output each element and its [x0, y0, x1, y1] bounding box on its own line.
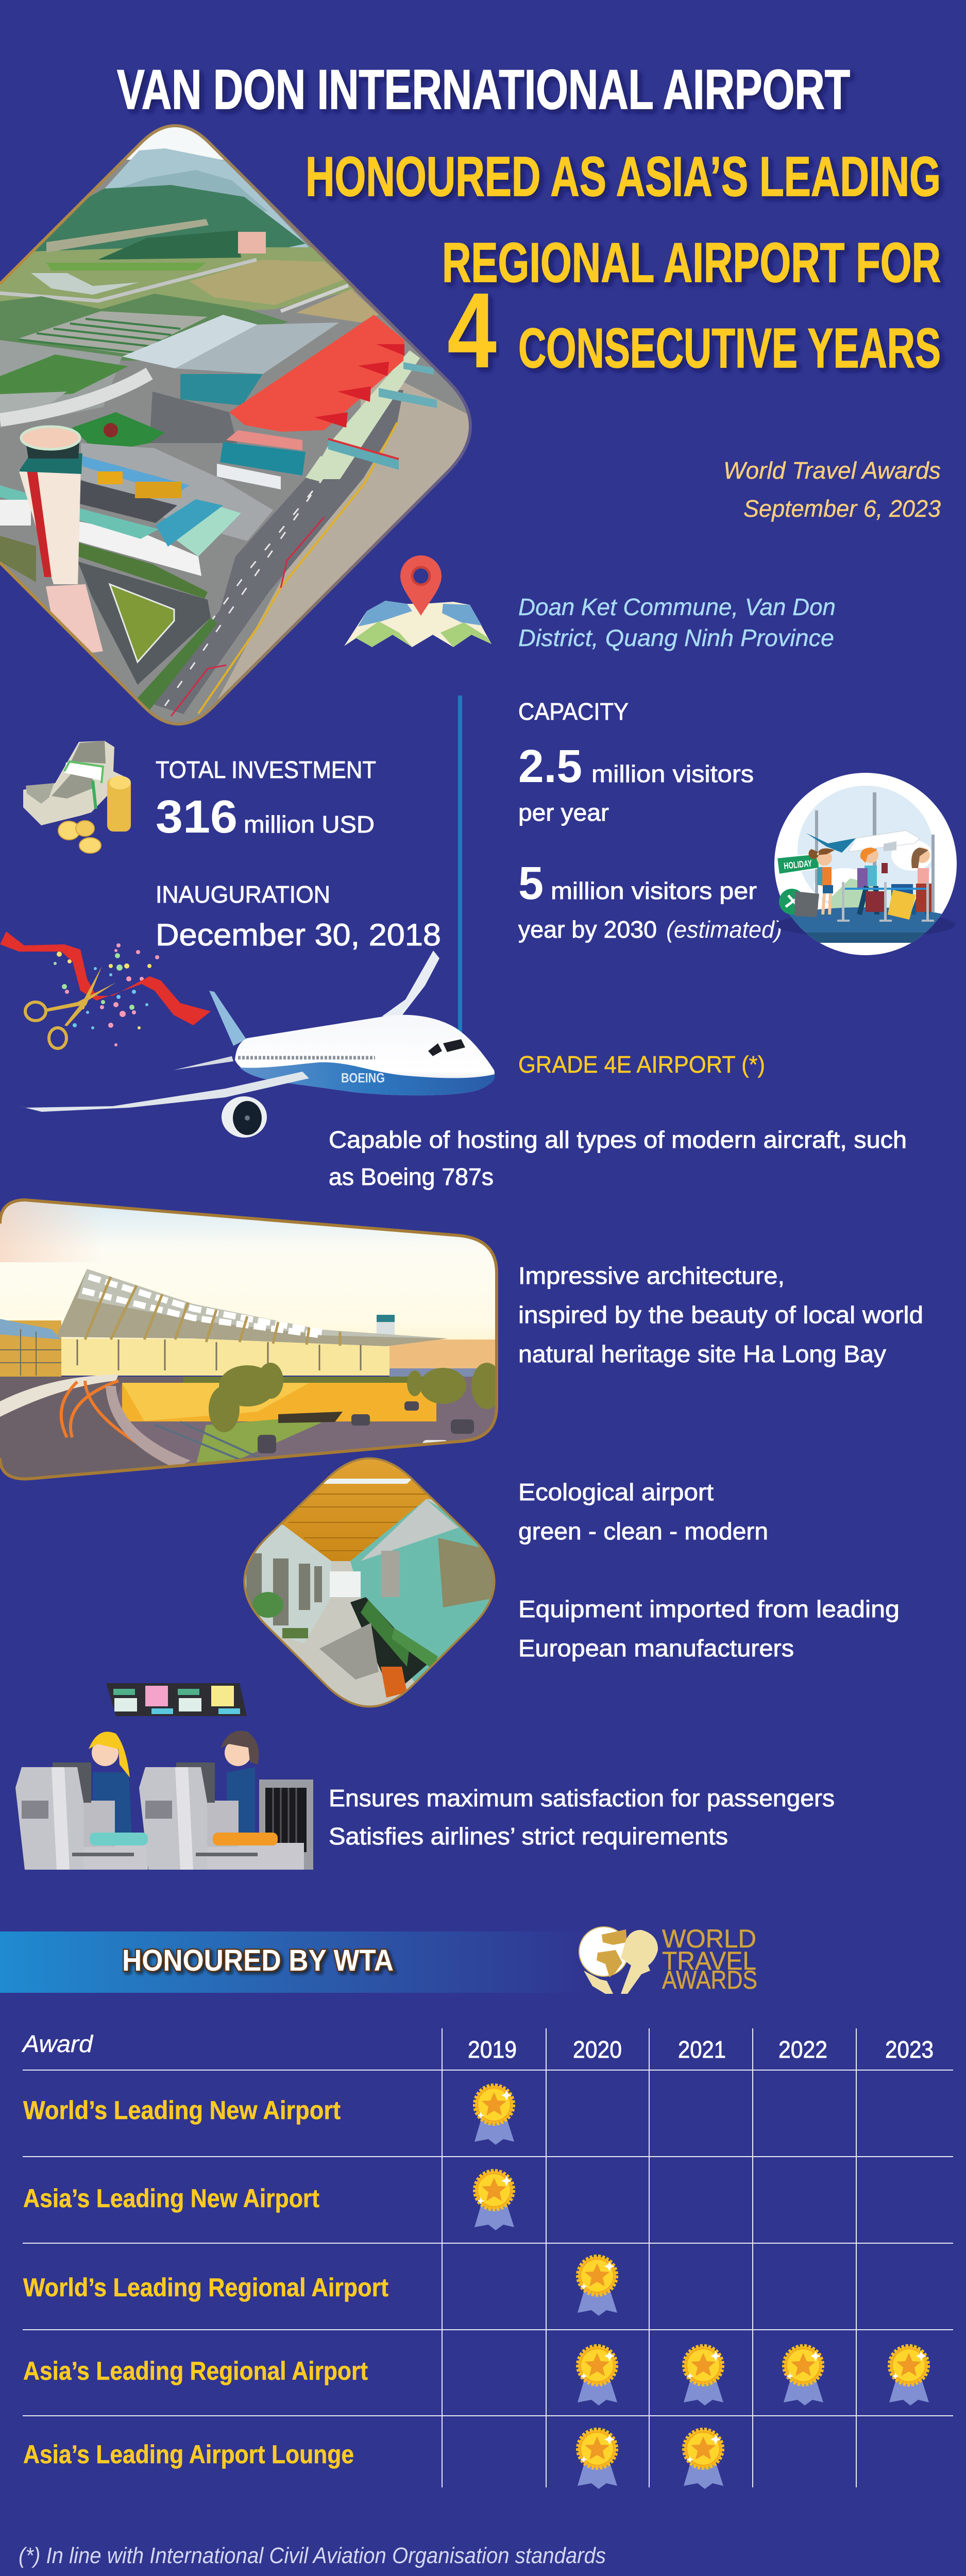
fuselage [235, 1015, 495, 1095]
text: capacity: million visitors per [551, 877, 757, 904]
text: capacity: per year [518, 799, 609, 826]
text: capable of hosting: as Boeing 787s [329, 1163, 494, 1190]
text: location: District, Quang Ninh Province [518, 624, 834, 651]
text: architecture: inspired by the beauty of local world [518, 1301, 923, 1328]
fuselage blue belly [240, 1062, 495, 1095]
row: World's Leading New Airport [23, 2086, 514, 2145]
text: inauguration [156, 881, 441, 952]
text: capable of hosting: Capable of hosting all types of modern aircraft, such [329, 1126, 907, 1153]
icon: map pin [344, 555, 492, 647]
icon: passengers queuing at airport [773, 773, 958, 955]
text: total investment [156, 756, 376, 843]
icon: check-in counters with staff [15, 1683, 313, 1870]
text: capacity [518, 698, 782, 943]
counter right [139, 1762, 304, 1870]
icon: scissors cutting red ribbon with confetti [0, 931, 211, 1048]
table header: 2022 [778, 2036, 827, 2063]
cockpit windows [428, 1039, 465, 1056]
title block [117, 58, 941, 391]
staff member with dark hair [221, 1731, 259, 1834]
table header: 2020 [573, 2036, 622, 2063]
text: equipment: European manufacturers [518, 1635, 794, 1662]
row: World's Leading Regional Airport: World’s Leading Regional Airport [23, 2273, 388, 2302]
aircraft label: BOEING [341, 1070, 385, 1086]
text: location: Doan Ket Commune, Van Don [518, 594, 836, 620]
section heading: HONOURED BY WTA [122, 1944, 394, 1977]
text: ecological: green - clean - modern [518, 1518, 768, 1545]
table: awards by year [21, 2028, 953, 2489]
table header: 2021 [678, 2036, 726, 2063]
text: capacity: million visitors [591, 760, 754, 787]
text: ecological [518, 1479, 768, 1545]
text: capable of hosting [329, 1126, 907, 1190]
row: World's Leading New Airport: World’s Leading New Airport [23, 2096, 341, 2125]
counter left [15, 1762, 148, 1870]
text: inauguration: INAUGURATION [156, 881, 330, 908]
headline number 4: 4 [447, 271, 497, 391]
section banner [0, 1931, 590, 1993]
text: location [518, 594, 836, 651]
row: Asia's Leading New Airport: Asia’s Leading New Airport [23, 2184, 319, 2213]
text: architecture [518, 1262, 923, 1367]
confetti dots [54, 943, 159, 1046]
text: inauguration: December 30, 2018 [156, 918, 441, 952]
text: capacity: year by 2030 [518, 916, 657, 943]
text: architecture: natural heritage site Ha Long Bay [518, 1341, 886, 1367]
row: Asia's Leading Regional Airport [23, 2346, 929, 2405]
text: satisfaction [329, 1785, 835, 1850]
photo: terminal interior diamond [243, 1457, 496, 1707]
text: architecture: Impressive architecture, [518, 1262, 785, 1289]
text: capacity: 5 [518, 858, 544, 909]
row: Asia's Leading Regional Airport: Asia’s Leading Regional Airport [23, 2357, 368, 2385]
text: awards date [723, 457, 941, 522]
text: awards date: September 6, 2023 [743, 495, 941, 522]
icon: passengers queuing at airport: HOLIDAY [783, 858, 812, 871]
divider: vertical blue line [458, 696, 462, 1033]
table header: 2019 [468, 2036, 517, 2063]
table header [21, 2030, 934, 2063]
table grid [23, 2028, 953, 2487]
luggage [90, 1833, 278, 1845]
logo: World Travel Awards: AWARDS [662, 1965, 757, 1994]
text: equipment: Equipment imported from leading [518, 1596, 900, 1622]
cabin windows [238, 1056, 375, 1059]
text: capacity: (estimated) [666, 916, 782, 943]
photo: terminal architecture [0, 1195, 502, 1485]
text: satisfaction: Ensures maximum satisfaction for passengers [329, 1785, 835, 1811]
text: total investment: 316 [156, 791, 238, 843]
text: capacity: CAPACITY [518, 698, 629, 725]
flight information boards [106, 1683, 247, 1716]
footnote: (*) In line with International Civil Aviation Organisation standards [19, 2543, 606, 2568]
tail fin [209, 991, 246, 1046]
photo: aerial view of airport in diamond frame [0, 124, 472, 725]
text: capacity: 2.5 [518, 741, 582, 792]
logo: World Travel Awards: TRAVEL [662, 1946, 756, 1975]
engine [222, 1096, 267, 1138]
logo: World Travel Awards [579, 1924, 757, 1994]
row: World's Leading Regional Airport [23, 2257, 617, 2316]
table header: 2023 [885, 2036, 934, 2063]
row: Asia's Leading Airport Lounge: Asia’s Leading Airport Lounge [23, 2440, 354, 2469]
icon: Boeing 787 aircraft [19, 951, 495, 1138]
near wing [19, 1072, 309, 1112]
table header: Award [21, 2030, 93, 2057]
row: Asia's Leading New Airport [23, 2171, 514, 2230]
text: total investment: TOTAL INVESTMENT [156, 756, 376, 783]
text: equipment [518, 1596, 900, 1662]
icon: money and coins [23, 741, 131, 853]
staff member with blonde hair [89, 1732, 132, 1834]
text: grade 4E: GRADE 4E AIRPORT (*) [518, 1051, 765, 1078]
text: awards date: World Travel Awards [723, 457, 941, 484]
text: satisfaction: Satisfies airlines’ strict requirements [329, 1823, 728, 1850]
far wing [382, 951, 439, 1016]
row: Asia's Leading Airport Lounge [23, 2430, 723, 2489]
text: ecological: Ecological airport [518, 1479, 714, 1505]
stabilizer [174, 1056, 233, 1070]
logo: World Travel Awards: WORLD [662, 1924, 756, 1953]
security scanner [259, 1780, 313, 1870]
text: total investment: million USD [244, 811, 375, 838]
